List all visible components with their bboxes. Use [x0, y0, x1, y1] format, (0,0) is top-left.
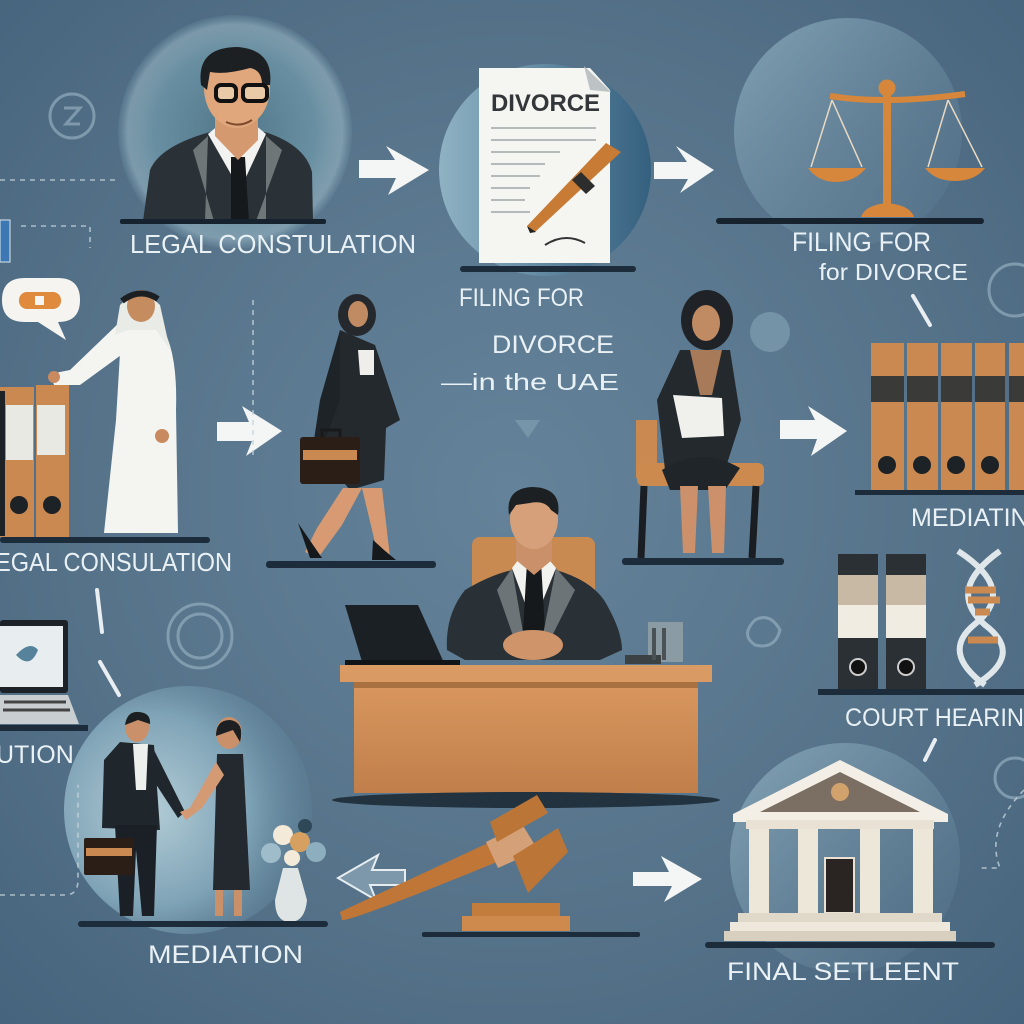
icon: flower vase: [261, 819, 326, 922]
panel: courthouse: [705, 743, 995, 973]
center title: FILING FOR: [459, 284, 584, 312]
panel: divorce document: [439, 64, 651, 276]
figure: judge at desk: [447, 487, 622, 660]
panel: binders left: [0, 385, 69, 538]
panel: scales of justice: [716, 18, 985, 246]
center title: —in the UAE: [441, 369, 619, 395]
arrow 4: [780, 406, 847, 456]
icon: laptop: [345, 605, 460, 666]
arrow 6: [633, 856, 702, 902]
desk: [340, 665, 712, 793]
white tick strokes: [97, 296, 935, 760]
icon: document: DIVORCE: [491, 90, 600, 117]
figure: walking woman: [298, 294, 400, 560]
icon: blue tablet: [0, 220, 10, 262]
icon: scales: [808, 82, 985, 217]
panel: small binders and dna: [818, 551, 1024, 695]
panel: legal consultation lawyer: [118, 15, 352, 249]
arrow 3: [217, 406, 282, 456]
center title: DIVORCE: [492, 331, 614, 359]
figure: man in kandura: [48, 290, 178, 533]
dashed connectors: [0, 180, 1024, 895]
icon: speech bubble: [2, 278, 80, 340]
figure: seated woman: [636, 290, 764, 558]
figure: man handshake: [84, 712, 185, 916]
shelf shadow: [120, 219, 326, 224]
label: legal consulation left: EGAL CONSULATION: [0, 547, 232, 577]
label: filing for divorce right: [792, 227, 968, 285]
panel: binders right: [855, 343, 1024, 495]
icon: pen: [527, 143, 621, 233]
icon: desk items: [625, 622, 683, 664]
label: final settlement: FINAL SETLEENT: [727, 958, 959, 986]
icon: decorative faint symbols: [50, 94, 1024, 798]
icon: helix: [958, 551, 1003, 685]
label: legal consultation: LEGAL CONSTULATION: [130, 229, 416, 259]
label: filing for divorce right: for DIVORCE: [819, 259, 968, 285]
label: mediation: MEDIATION: [148, 941, 303, 969]
icon: document: [479, 66, 611, 263]
arrow 5 left: [338, 855, 405, 900]
arrow 2: [654, 146, 714, 193]
icon: courthouse: [724, 760, 956, 941]
figure: woman handshake: [180, 717, 250, 916]
panel: mediation handshake: [64, 686, 328, 934]
icon: lawyer portrait: [143, 47, 313, 221]
icon: gavel: [340, 795, 640, 937]
label: filing for divorce right: FILING FOR: [792, 227, 931, 257]
center title: [441, 284, 619, 395]
panel: laptop left: [0, 620, 88, 731]
arrow 1: [359, 146, 429, 195]
shadow and label: legal consultation left: [0, 537, 210, 543]
